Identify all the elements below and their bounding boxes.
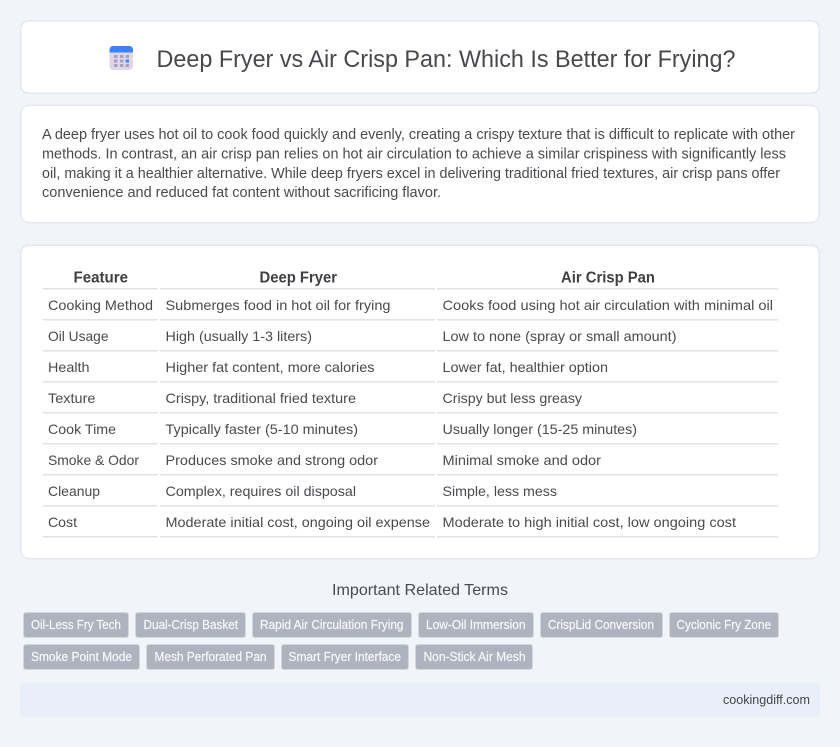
row: cook time (48, 421, 637, 437)
row: smoke and odor: Minimal smoke and odor (442, 452, 601, 468)
row: health: Health (48, 359, 90, 375)
row: health: Lower fat, healthier option (442, 359, 608, 375)
intro text: methods. In contrast, an air crisp pan relies on hot air circulation to achieve a similar crispiness with significantly less (42, 146, 786, 162)
tag (24, 644, 140, 670)
tag: Dual-Crisp Basket (144, 618, 238, 632)
row: smoke and odor (48, 452, 601, 468)
row: cooking method: Submerges food in hot oil for frying (166, 297, 390, 313)
row: texture (48, 390, 582, 406)
intro text: oil, making it a healthier alternative. While deep fryers excel in delivering traditional fried textures, air crisp pans offer (42, 166, 780, 182)
panel: comparison table (21, 245, 819, 559)
title: Deep Fryer vs Air Crisp Pan: Which Is Better for Frying? (156, 46, 736, 73)
tag: Cyclonic Fry Zone (676, 618, 771, 632)
tag (136, 612, 246, 638)
row: cost: Moderate initial cost, ongoing oil expense (166, 514, 430, 530)
footer source text: cookingdiff.com (723, 693, 810, 707)
row: cooking method: Cooking Method (48, 297, 153, 313)
row: cook time: Typically faster (5-10 minutes) (166, 421, 358, 437)
table header: Air Crisp Pan (561, 270, 655, 286)
tag (416, 644, 532, 670)
heading: important related terms: Important Related Terms (332, 582, 508, 599)
icon: calendar (110, 46, 133, 70)
tag (670, 612, 778, 638)
tag: Smoke Point Mode (31, 650, 132, 664)
table header: Feature (74, 270, 128, 286)
related term tags (24, 612, 778, 670)
row: smoke and odor: Smoke & Odor (48, 452, 139, 468)
footer bar (20, 683, 820, 717)
panel: introduction (21, 105, 819, 223)
tag (418, 612, 534, 638)
row: texture: Crispy, traditional fried texture (166, 390, 356, 406)
row: oil usage (48, 328, 676, 344)
tag: Oil-Less Fry Tech (31, 618, 121, 632)
tag: Smart Fryer Interface (288, 650, 401, 664)
row: cost (48, 514, 736, 530)
tag (540, 612, 662, 638)
row: cook time: Cook Time (48, 421, 116, 437)
header panel (21, 21, 819, 93)
row: oil usage: High (usually 1-3 liters) (166, 328, 312, 344)
row: oil usage: Low to none (spray or small amount) (442, 328, 676, 344)
tag: CrispLid Conversion (548, 618, 654, 632)
row: smoke and odor: Produces smoke and strong odor (166, 452, 378, 468)
row: texture: Texture (48, 390, 96, 406)
row: cook time: Usually longer (15-25 minutes) (442, 421, 637, 437)
tag (146, 644, 274, 670)
table header: Deep Fryer (260, 270, 337, 286)
row: health (48, 359, 608, 375)
tag: Low-Oil Immersion (426, 618, 526, 632)
tag: Mesh Perforated Pan (154, 650, 267, 664)
row: health: Higher fat content, more calories (166, 359, 374, 375)
row: cleanup: Simple, less mess (442, 483, 557, 499)
tag: Rapid Air Circulation Frying (260, 618, 404, 632)
tag (282, 644, 408, 670)
tag (24, 612, 128, 638)
intro text (42, 127, 795, 201)
row: cost: Moderate to high initial cost, low ongoing cost (442, 514, 736, 530)
intro text: convenience and reduced fat content without sacrificing flavor. (42, 185, 441, 201)
tag (252, 612, 412, 638)
row: texture: Crispy but less greasy (442, 390, 582, 406)
row: oil usage: Oil Usage (48, 328, 109, 344)
row: cooking method: Cooks food using hot air circulation with minimal oil (442, 297, 773, 313)
row: cleanup: Complex, requires oil disposal (166, 483, 356, 499)
row: cleanup: Cleanup (48, 483, 100, 499)
row: cleanup (48, 483, 557, 499)
table header (74, 270, 655, 286)
tag: Non-Stick Air Mesh (424, 650, 526, 664)
row: cost: Cost (48, 514, 77, 530)
intro text: A deep fryer uses hot oil to cook food quickly and evenly, creating a crispy texture that is difficult to replicate with other (42, 127, 795, 143)
row: cooking method (48, 297, 773, 313)
